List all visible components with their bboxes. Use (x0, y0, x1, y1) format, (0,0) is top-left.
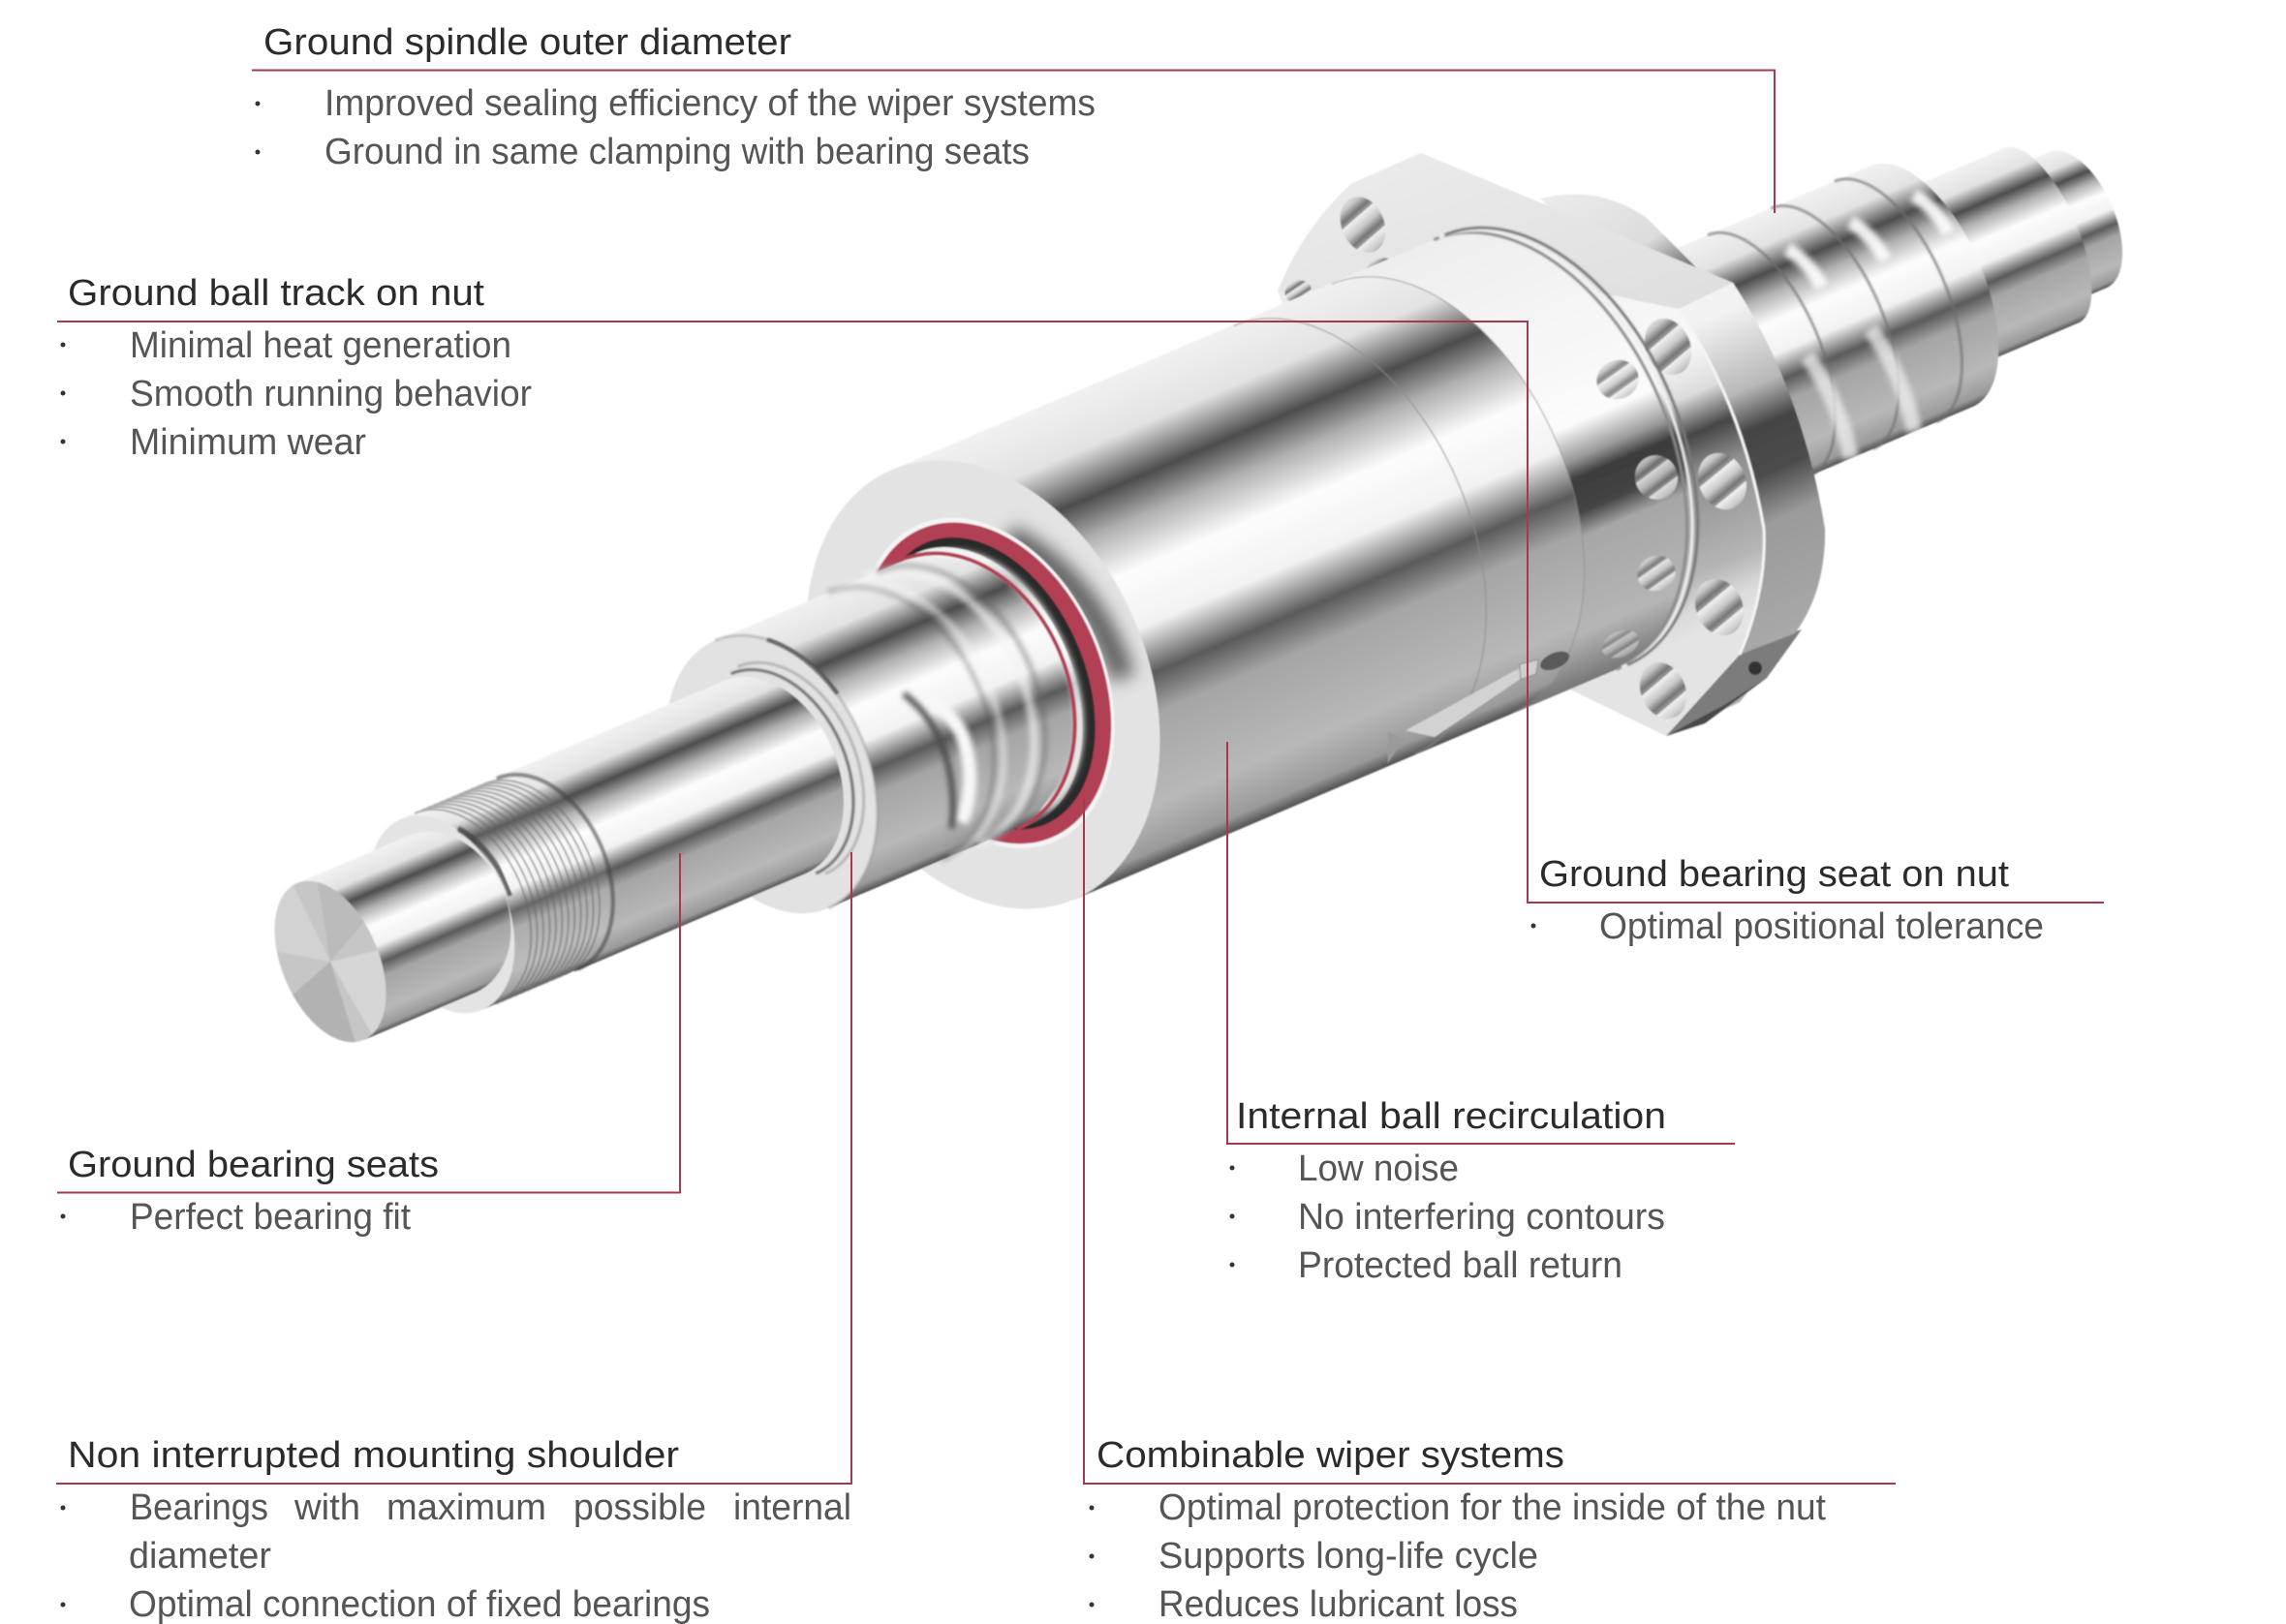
bullet list: Optimal positional tolerance (1599, 906, 2044, 947)
nut body (892, 181, 1755, 900)
callout: combinable wiper systems (1084, 799, 1896, 1624)
heading: Ground bearing seat on nut (1539, 854, 2009, 895)
mounting shoulder fillet (493, 653, 873, 971)
callout: ground spindle outer diameter (252, 22, 1775, 213)
callout: non interrupted mounting shoulder (56, 852, 851, 1624)
bullet list (60, 1487, 851, 1624)
threaded section (401, 752, 638, 1010)
callout: internal ball recirculation (1227, 742, 1735, 1286)
nut flange (1278, 153, 1825, 736)
bullet list (60, 325, 532, 463)
bullet list: Low noise (1298, 1149, 1459, 1189)
front face (740, 406, 1225, 964)
bullet list: with (293, 1487, 360, 1528)
bullet list: Minimum wear (130, 422, 366, 463)
bullet list: maximum (386, 1487, 546, 1528)
heading: Combinable wiper systems (1097, 1435, 1564, 1476)
spindle far end (1634, 85, 2163, 506)
heading: Non interrupted mounting shoulder (68, 1435, 679, 1476)
callout: ground ball track on nut (57, 273, 2104, 903)
rim holes (1591, 353, 1684, 663)
bullet list: Supports long-life cycle (1158, 1536, 1538, 1577)
nut neck and shoulders (715, 521, 1109, 908)
product: ball screw assembly (274, 147, 2123, 1043)
bullet list: Ground in same clamping with bearing seats (324, 132, 1030, 172)
shoulder groove (896, 679, 994, 829)
bullet list: Minimal heat generation (130, 325, 511, 366)
bullet list: Bearings (130, 1487, 268, 1528)
leader line (1084, 799, 1896, 1484)
ball return (1401, 662, 1543, 747)
bullet list: possible (573, 1487, 706, 1528)
bullet list: Optimal protection for the inside of the nut (1158, 1487, 1826, 1528)
bullet list: Improved sealing efficiency of the wiper systems (324, 83, 1096, 124)
heading: Ground bearing seats (68, 1145, 439, 1185)
bullet list: diameter (129, 1536, 271, 1577)
silver cup (826, 514, 1124, 862)
bullet list: internal (733, 1487, 851, 1528)
bullet list (1230, 1149, 1665, 1286)
bullet list: Optimal connection of fixed bearings (129, 1584, 710, 1624)
leader line (1227, 742, 1735, 1144)
bullet list: Protected ball return (1298, 1245, 1622, 1286)
callout: ground bearing seat on nut (1530, 854, 2044, 947)
bullet list (1089, 1487, 1826, 1624)
leader line (56, 852, 851, 1484)
leader line (57, 322, 2104, 903)
leader line (57, 853, 680, 1193)
heading: Internal ball recirculation (1236, 1096, 1666, 1137)
bullet list (256, 83, 1096, 172)
flange holes (1282, 190, 1755, 726)
heading: Ground spindle outer diameter (263, 22, 791, 63)
callout: ground bearing seats (57, 853, 680, 1238)
end cap (274, 880, 386, 1043)
leader line (252, 70, 1775, 213)
bullet list: No interfering contours (1298, 1197, 1665, 1238)
red wiper ring (811, 478, 1162, 888)
heading: Ground ball track on nut (68, 273, 484, 314)
bullet list: Smooth running behavior (130, 374, 532, 414)
bullet list: Reduces lubricant loss (1158, 1584, 1518, 1624)
nut body and front details (892, 178, 1761, 900)
bullet list: Perfect bearing fit (130, 1197, 411, 1238)
